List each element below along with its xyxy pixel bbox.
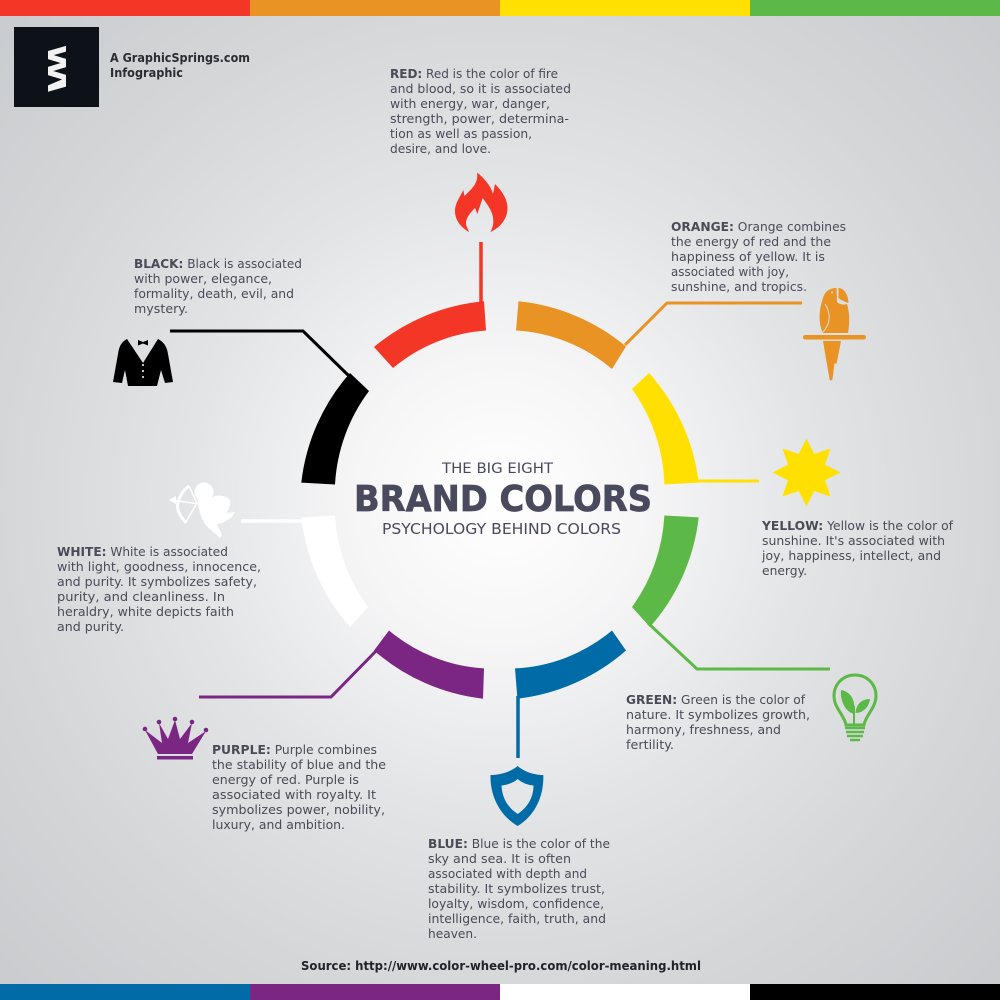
text: red: strength, power, determina- <box>390 112 569 126</box>
icon: sun star <box>772 438 840 506</box>
text: black: with power, elegance, <box>134 272 272 286</box>
ring segment: green <box>632 516 699 627</box>
text: red: desire, and love. <box>390 142 491 156</box>
top colour bar <box>0 0 1000 16</box>
text: purple: luxury, and ambition. <box>212 818 345 832</box>
text: purple: symbolizes power, nobility, <box>212 803 385 817</box>
text: purple: PURPLE: Purple combines <box>212 743 377 757</box>
title: BRAND COLORS <box>354 479 652 520</box>
ring segment: red <box>374 301 486 368</box>
ring segment: white <box>301 516 368 627</box>
text: blue: associated with depth and <box>428 867 587 881</box>
text: yellow <box>761 519 954 578</box>
text: orange <box>671 220 846 294</box>
text: white: purity, and cleanliness. In <box>57 590 225 604</box>
icon: parrot <box>803 288 866 380</box>
text: orange: associated with joy, <box>671 265 789 279</box>
connector: black <box>170 331 349 376</box>
connector: orange <box>625 303 802 345</box>
text: yellow: YELLOW: Yellow is the color of <box>761 519 954 533</box>
text: blue <box>428 837 610 941</box>
text: orange: ORANGE: Orange combines <box>671 220 846 234</box>
logo caption: A GraphicSprings.com <box>110 51 250 65</box>
connector: white <box>241 519 304 523</box>
text: blue: stability. It symbolizes trust, <box>428 882 605 896</box>
text: yellow: sunshine. It's associated with <box>762 534 945 548</box>
text: orange: happiness of yellow. It is <box>671 250 825 264</box>
text: orange: sunshine, and tropics. <box>671 280 807 294</box>
text: green: GREEN: Green is the color of <box>626 693 806 707</box>
text: red: and blood, so it is associated <box>390 82 571 96</box>
title: PSYCHOLOGY BEHIND COLORS <box>382 520 621 538</box>
ring segment: orange <box>516 301 626 369</box>
text: blue: heaven. <box>428 927 477 941</box>
text: red <box>390 67 571 156</box>
icon: shield <box>490 766 543 826</box>
icon: cupid <box>169 482 235 538</box>
text: white: heraldry, white depicts faith <box>57 605 234 619</box>
text: blue: BLUE: Blue is the color of the <box>428 837 610 851</box>
title <box>354 461 652 538</box>
icon: lightbulb with leaves <box>834 675 876 740</box>
text: green: nature. It symbolizes growth, <box>626 708 810 722</box>
text: blue: sky and sea. It is often <box>428 852 571 866</box>
text: blue: loyalty, wisdom, confidence, <box>428 897 604 911</box>
source: Source: http://www.color-wheel-pro.com/color-meaning.html <box>301 959 701 973</box>
text: blue: intelligence, faith, truth, and <box>428 912 606 926</box>
text: white: with light, goodness, innocence, <box>57 560 261 574</box>
ring segment: purple <box>374 630 484 699</box>
ring segment: yellow <box>632 373 699 484</box>
text: black <box>134 257 302 316</box>
ring segment: blue <box>515 630 626 699</box>
text: orange: the energy of red and the <box>671 235 831 249</box>
connector: yellow <box>697 480 759 482</box>
text: green <box>626 693 810 752</box>
logo <box>14 27 99 107</box>
text: black: mystery. <box>134 302 188 316</box>
logo caption <box>110 51 250 80</box>
text: purple: energy of red. Purple is <box>212 773 359 787</box>
text: white <box>57 545 261 634</box>
text: yellow: joy, happiness, intellect, and <box>761 549 941 563</box>
text: white: WHITE: White is associated <box>57 545 228 559</box>
text: green: fertility. <box>626 738 674 752</box>
text: green: harmony, freshness, and <box>626 723 781 737</box>
text: black: BLACK: Black is associated <box>134 257 302 271</box>
text: black: formality, death, evil, and <box>134 287 294 301</box>
ring segment: black <box>301 373 369 484</box>
icon: crown <box>143 717 208 760</box>
connector: blue <box>516 696 520 758</box>
connector: purple <box>199 651 376 697</box>
text: white: and purity. It symbolizes safety, <box>57 575 257 589</box>
text: red: RED: Red is the color of fire <box>390 67 558 81</box>
text: red: with energy, war, danger, <box>390 97 550 111</box>
icon: jacket <box>113 339 173 386</box>
text: yellow: energy. <box>762 564 807 578</box>
bottom colour bar <box>0 984 1000 1000</box>
text: purple <box>212 743 386 832</box>
icon: flame <box>455 172 508 232</box>
text: purple: the stability of blue and the <box>212 758 386 772</box>
text: purple: associated with royalty. It <box>212 788 376 802</box>
connector: green <box>648 623 830 669</box>
connector: red <box>479 242 483 304</box>
title: THE BIG EIGHT <box>441 461 553 477</box>
text: red: tion as well as passion, <box>390 127 532 141</box>
text: white: and purity. <box>57 620 124 634</box>
logo caption: Infographic <box>110 66 183 80</box>
